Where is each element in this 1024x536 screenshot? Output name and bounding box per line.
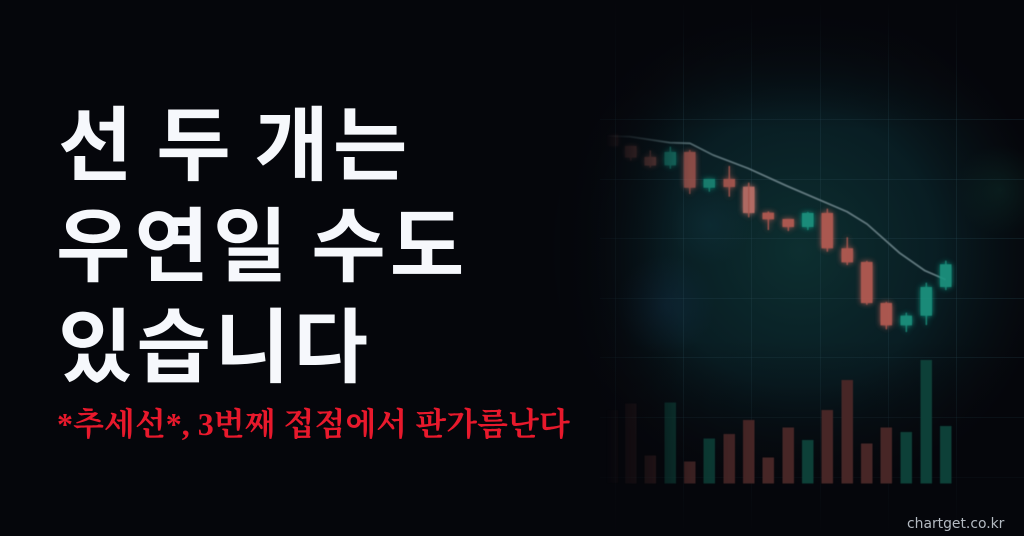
title bbox=[56, 81, 468, 400]
watermark: chartget.co.kr bbox=[907, 516, 1004, 532]
volume bars bbox=[606, 360, 952, 484]
title line 1: 선 두 개는 bbox=[58, 81, 411, 198]
title line 2: 우연일 수도 bbox=[56, 182, 468, 299]
subtitle: *추세선*, 3번째 접점에서 판가름난다 bbox=[57, 406, 570, 442]
title line 3: 있습니다 bbox=[58, 283, 372, 400]
candlesticks bbox=[606, 135, 952, 332]
chart background and candlestick chart bbox=[600, 43, 1024, 484]
trend line bbox=[607, 136, 945, 279]
